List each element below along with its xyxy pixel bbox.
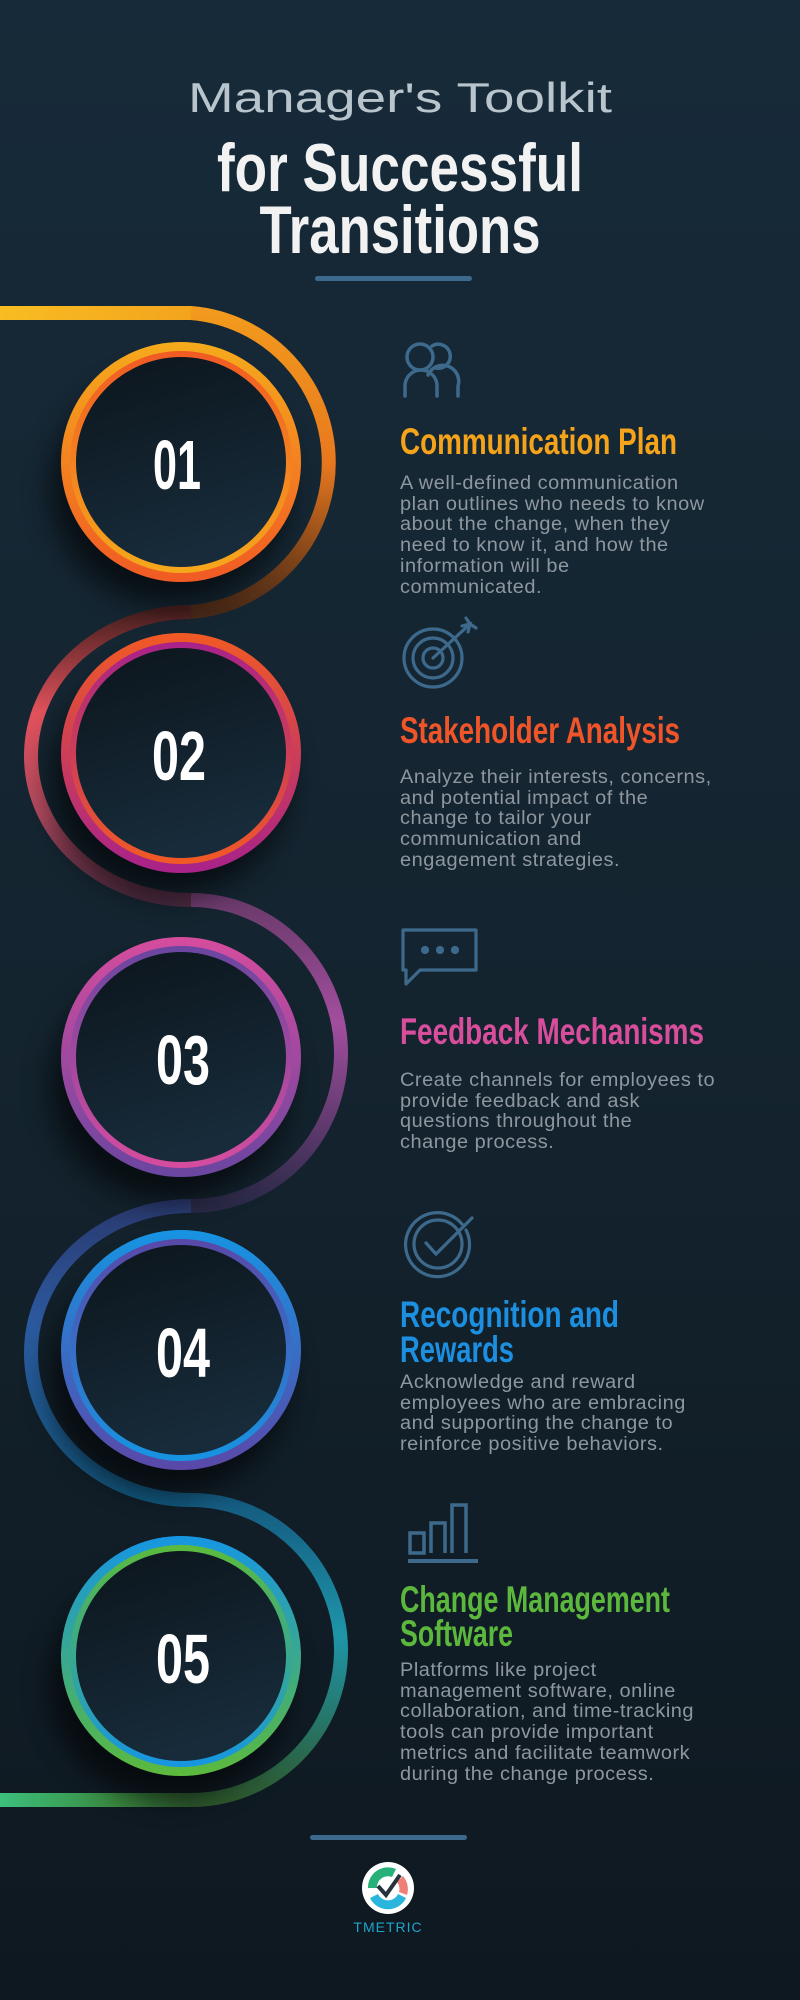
text: communication plan — [400, 473, 705, 598]
text: communication plan: information will be — [400, 556, 570, 577]
headings: Software — [400, 1613, 513, 1654]
snake track — [0, 313, 341, 1800]
text: stakeholder analysis: change to tailor your — [400, 808, 592, 829]
circle 04 — [50, 1230, 301, 1493]
text: software — [400, 1660, 694, 1785]
headings: Feedback Mechanisms — [400, 1011, 704, 1052]
text: stakeholder analysis — [400, 767, 712, 871]
title: for Successful — [217, 130, 583, 206]
icon: target — [404, 618, 476, 687]
text: communication plan: A well-defined communication — [400, 473, 679, 494]
circle 03 — [50, 937, 301, 1200]
text: software: metrics and facilitate teamwork — [400, 1743, 690, 1764]
text: communication plan: plan outlines who needs to know — [400, 494, 705, 515]
circle 02 — [50, 633, 301, 896]
text: feedback: Create channels for employees to — [400, 1070, 715, 1091]
title: Manager's Toolkit — [188, 74, 612, 121]
text: software: Platforms like project — [400, 1660, 597, 1681]
headings: Change Management — [400, 1579, 670, 1620]
circle 04: 04 — [156, 1314, 210, 1392]
text: software: collaboration, and time-tracking — [400, 1701, 694, 1722]
text: recognition: reinforce positive behaviors. — [400, 1434, 664, 1455]
icon: people — [405, 344, 459, 396]
circle 05: 05 — [156, 1620, 210, 1698]
headings: Rewards — [400, 1329, 514, 1370]
text: software: during the change process. — [400, 1764, 654, 1785]
headings: Stakeholder Analysis — [400, 710, 680, 751]
text: communication plan: communicated. — [400, 577, 542, 598]
headings: Communication Plan — [400, 421, 677, 462]
logo — [353, 1862, 423, 1935]
text: stakeholder analysis: and potential impact of the — [400, 788, 648, 809]
text: recognition: and supporting the change to — [400, 1413, 673, 1434]
text: feedback: questions throughout the — [400, 1111, 632, 1132]
title: Transitions — [260, 192, 540, 268]
icon: chat bubble — [403, 930, 476, 984]
circle 01 — [50, 342, 301, 605]
logo: TMETRIC — [353, 1919, 423, 1935]
text: recognition — [400, 1372, 686, 1455]
circle 01: 01 — [153, 426, 201, 504]
text: stakeholder analysis: Analyze their interests, concerns, — [400, 767, 712, 788]
circle 02: 02 — [152, 717, 206, 795]
title — [188, 74, 612, 268]
headings: Recognition and — [400, 1294, 619, 1335]
text: feedback: change process. — [400, 1132, 554, 1153]
icon: check circle — [406, 1213, 472, 1277]
text: software: management software, online — [400, 1681, 676, 1702]
headings — [400, 421, 704, 1654]
text: stakeholder analysis: engagement strategies. — [400, 850, 620, 871]
text: communication plan: need to know it, and how the — [400, 535, 669, 556]
circle 05 — [50, 1536, 301, 1799]
text: recognition: employees who are embracing — [400, 1393, 686, 1414]
text: communication plan: about the change, when they — [400, 514, 670, 535]
text: feedback — [400, 1070, 715, 1153]
circle 03: 03 — [156, 1021, 210, 1099]
icon: bar chart — [408, 1505, 478, 1561]
text: feedback: provide feedback and ask — [400, 1091, 640, 1112]
text: stakeholder analysis: communication and — [400, 829, 582, 850]
text: recognition: Acknowledge and reward — [400, 1372, 636, 1393]
text: software: tools can provide important — [400, 1722, 654, 1743]
